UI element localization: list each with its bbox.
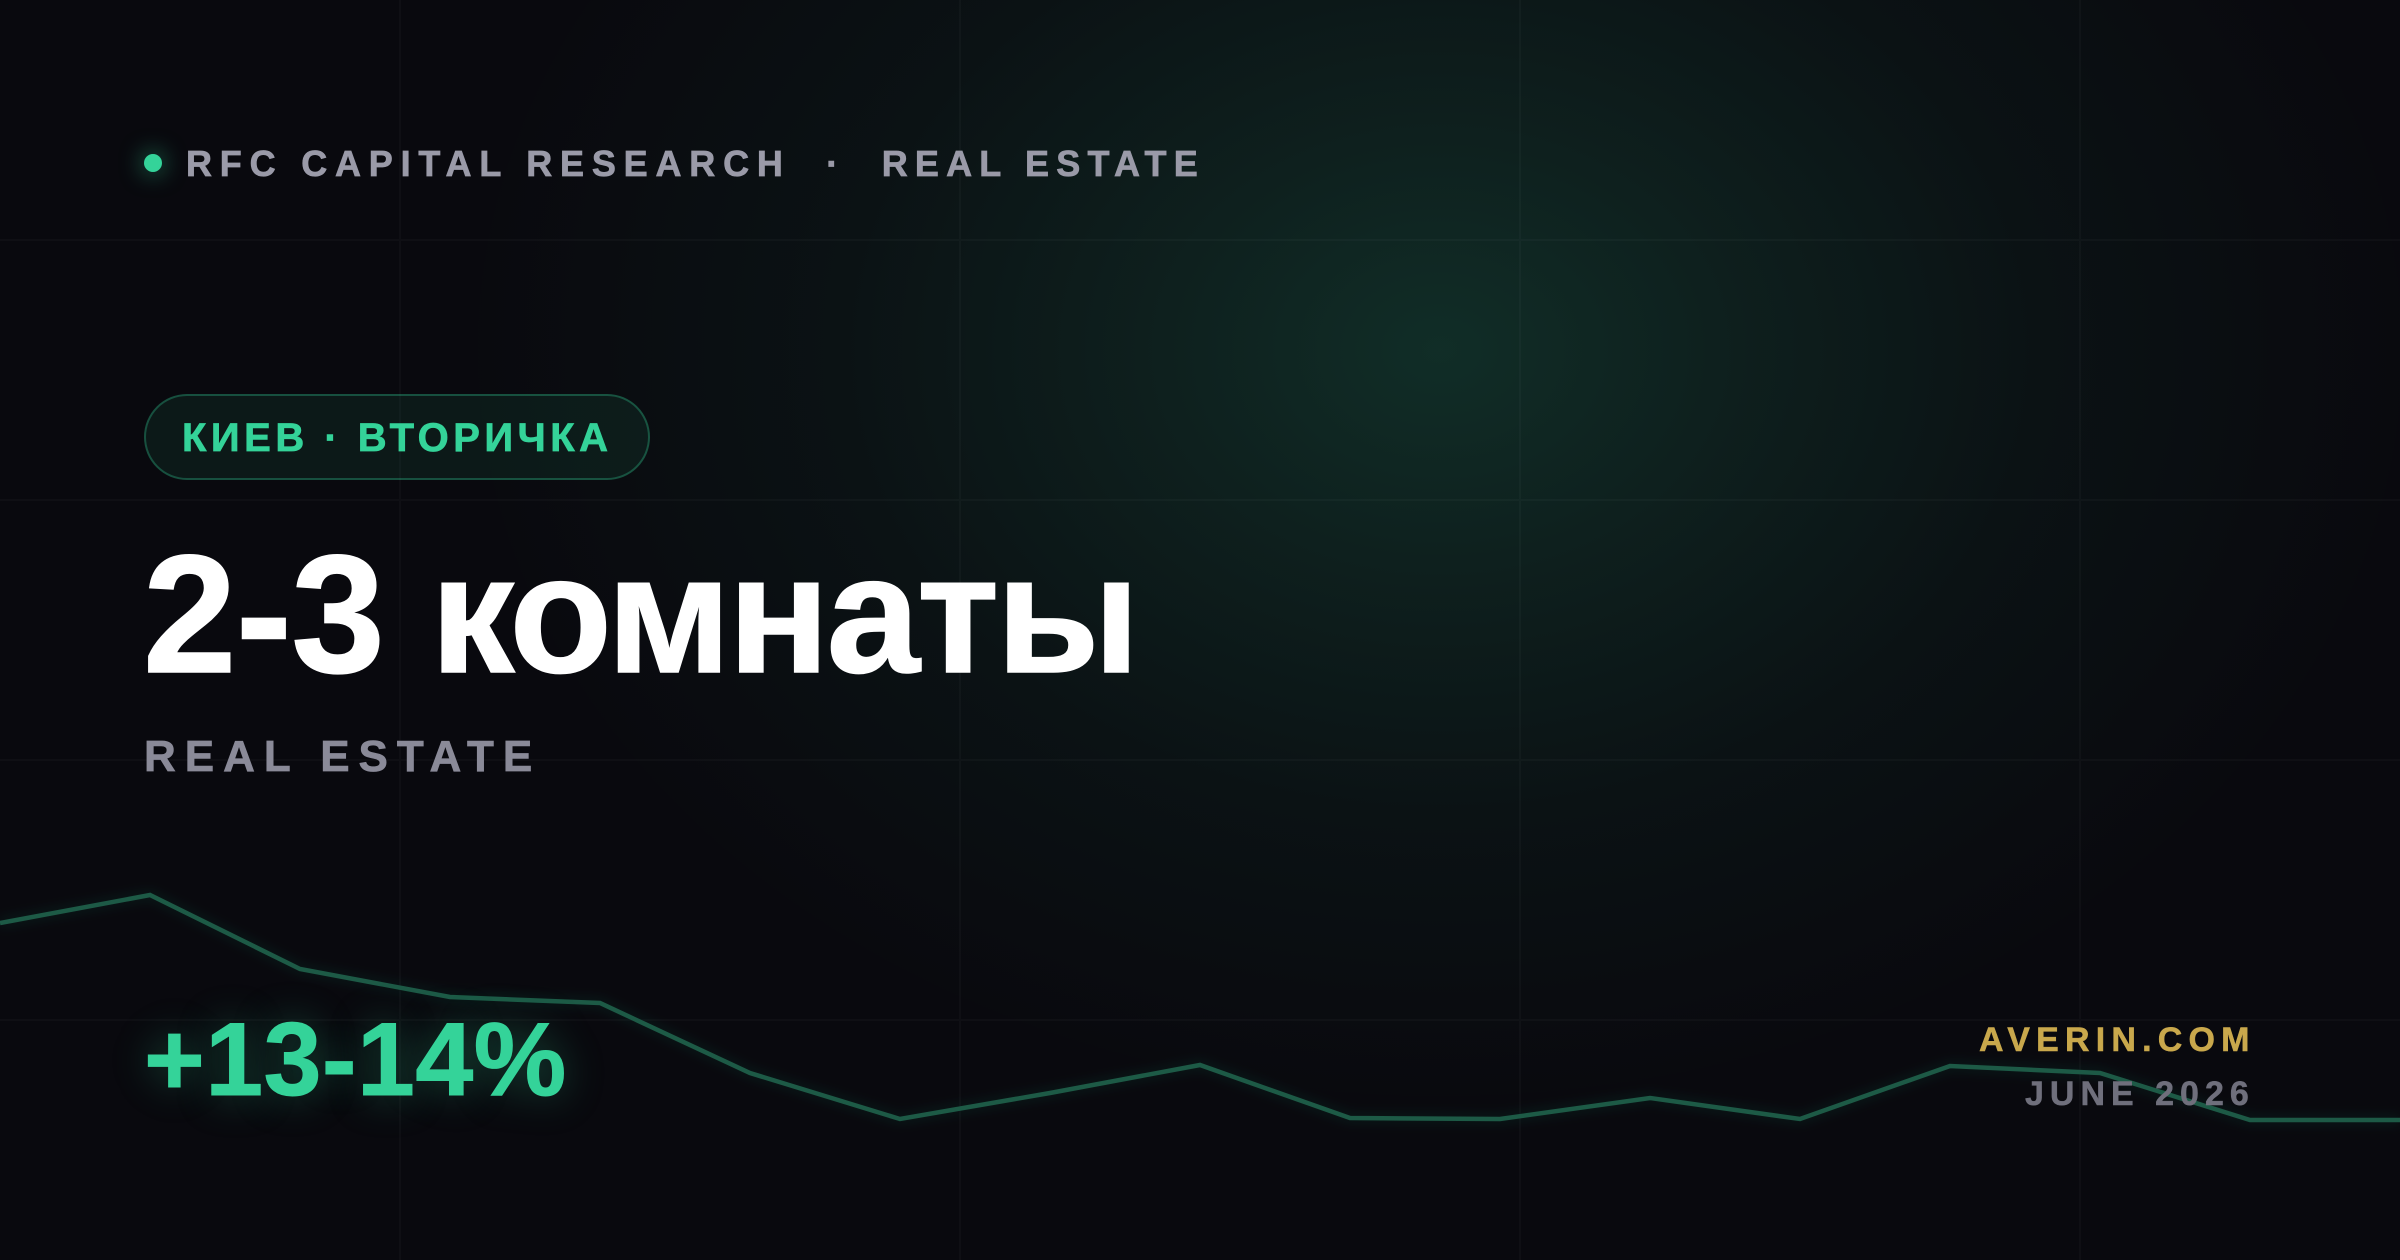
badge: city and market bbox=[144, 394, 650, 480]
badge text: КИЕВ · ВТОРИЧКА bbox=[182, 416, 613, 460]
header label: RFC CAPITAL RESEARCH · REAL ESTATE bbox=[186, 143, 1205, 184]
chart line bbox=[0, 895, 2400, 1120]
growth figure: +13-14% bbox=[144, 1002, 567, 1118]
date: JUNE 2026 bbox=[2025, 1075, 2255, 1113]
icon: status dot bbox=[144, 154, 162, 172]
title: 2-3 комнаты bbox=[143, 520, 1137, 708]
source site: AVERIN.COM bbox=[1979, 1021, 2256, 1059]
subtitle: REAL ESTATE bbox=[144, 732, 541, 781]
